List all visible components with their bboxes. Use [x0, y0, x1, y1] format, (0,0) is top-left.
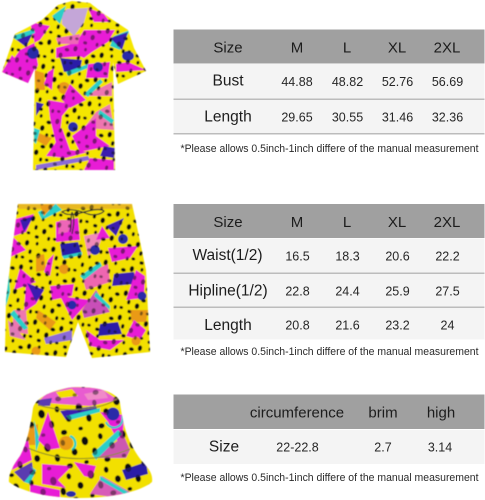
panel: shirt size table: 2XL: [434, 40, 460, 56]
panel: shorts size table: 16.5: [285, 250, 310, 264]
icon: patterned shorts: [0, 200, 155, 360]
panel: shorts size table: Hipline(1/2): [188, 282, 268, 300]
panel: hat size table: high: [427, 404, 455, 422]
panel: shirt size table: 44.88: [281, 75, 313, 89]
panel: hat size table: 2.7: [374, 440, 392, 454]
panel: shirt size table: 52.76: [382, 75, 413, 89]
panel: shirt size table: 32.36: [432, 110, 463, 124]
panel: shorts size table: 25.9: [385, 284, 410, 298]
panel: shorts size table: 24: [441, 318, 454, 332]
panel: shirt size table: M: [291, 40, 303, 56]
panel: hat size table: circumference: [250, 404, 344, 422]
panel: shirt size table: Bust: [212, 72, 244, 90]
panel: shirt size table: [174, 30, 484, 134]
panel: hat size table: 22-22.8: [276, 440, 319, 454]
panel: hat size table: brim: [368, 404, 398, 422]
panel: shirt size table: XL: [388, 40, 406, 56]
panel: shirt size table: 29.65: [281, 110, 313, 124]
panel: shorts size table: 20.8: [285, 318, 310, 332]
panel: hat size table: Size: [209, 438, 239, 456]
shorts table note: *Please allows 0.5inch-1inch differe of the manual measurement: [180, 346, 478, 358]
panel: shorts size table: 23.2: [385, 318, 410, 332]
panel: shorts size table: Waist(1/2): [192, 247, 263, 264]
panel: shorts size table: 22.8: [285, 284, 310, 298]
panel: shorts size table: L: [343, 214, 351, 231]
panel: shorts size table: 21.6: [335, 318, 360, 332]
panel: shorts size table: Length: [204, 317, 252, 334]
panel: shirt size table: Size: [213, 40, 243, 56]
panel: hat size table: [174, 394, 484, 464]
panel: shorts size table: [174, 204, 484, 340]
panel: shorts size table: 18.3: [335, 250, 360, 264]
panel: shirt size table: 48.82: [332, 75, 363, 89]
icon: shorts drawstring: [62, 209, 104, 234]
panel: shorts size table: 24.4: [335, 284, 360, 298]
panel: hat size table: 3.14: [428, 440, 452, 454]
panel: shorts size table: XL: [388, 214, 406, 231]
panel: shorts size table: 20.6: [385, 250, 410, 264]
panel: shorts size table: 2XL: [434, 214, 460, 231]
icon: patterned shirt: [0, 0, 150, 170]
panel: shirt size table: Length: [204, 108, 252, 126]
hat table note: *Please allows 0.5inch-1inch differe of the manual measurement: [180, 472, 478, 484]
panel: shorts size table: 22.2: [435, 250, 460, 264]
panel: shirt size table: 56.69: [432, 75, 463, 89]
panel: shorts size table: 27.5: [435, 284, 460, 298]
panel: shorts size table: Size: [213, 214, 243, 231]
panel: shorts size table: M: [291, 214, 303, 231]
icon: patterned bucket hat: [8, 386, 153, 499]
panel: shirt size table: L: [343, 40, 351, 56]
panel: shirt size table: 30.55: [332, 110, 363, 124]
shirt table note: *Please allows 0.5inch-1inch differe of the manual measurement: [180, 143, 478, 155]
panel: shirt size table: 31.46: [382, 110, 413, 124]
